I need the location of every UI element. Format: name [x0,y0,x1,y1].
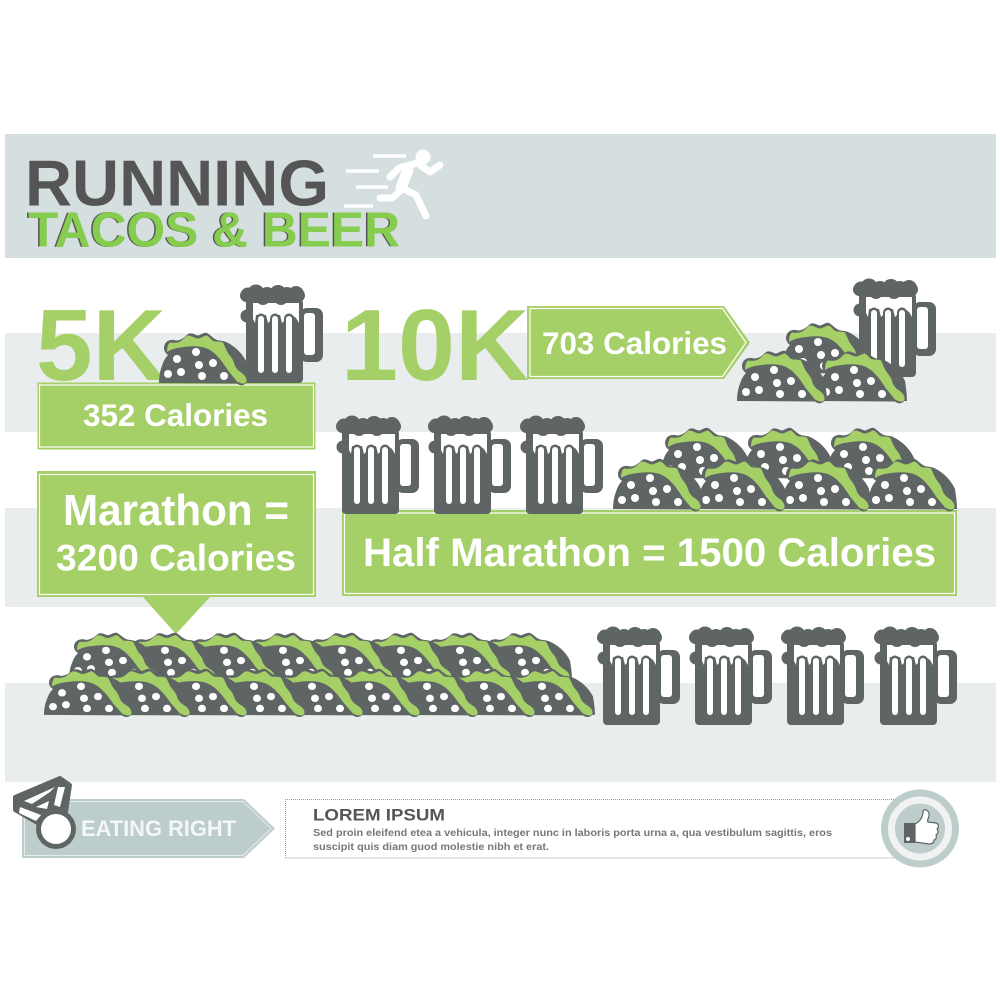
banner: eating right [22,799,275,858]
icon: medal [15,778,76,849]
icon: 5K taco [159,333,249,385]
subtitle: tacos and beer: TACOS & BEER [28,204,400,258]
icons: marathon beers [597,626,957,725]
heading: lorem ipsum: LOREM IPSUM [313,806,445,824]
icons: half marathon beers [336,416,603,514]
body text [313,827,832,853]
callout arrow: 703 calories [527,306,750,379]
callout: marathon calories: Marathon = [63,486,289,535]
callout: marathon calories [37,471,316,634]
icon: runner [344,150,440,216]
background bands [5,333,996,782]
icons: marathon tacos [44,633,595,717]
title: running: RUNNING [25,146,329,220]
callout: 352 calories [38,382,316,450]
callout: half marathon calories [342,510,957,596]
icon: 10K beer [853,278,936,377]
header panel [5,134,996,258]
10K heading: 10K [341,290,529,402]
callout: half marathon calories: Half Marathon = 1500 Calories [363,531,936,575]
body text: suscipit quis diam guod molestie nibh et erat. [313,841,549,853]
subtitle: tacos and beer: TACOS & BEER [26,204,398,258]
callout: marathon calories: 3200 Calories [56,538,296,578]
5K heading: 5K [36,290,166,402]
body text: Sed proin eleifend etea a vehicula, integer nunc in laboris porta urna a, qua vestibulum sagittis, eros [313,827,832,839]
callout arrow: 703 calories: 703 Calories [542,325,727,361]
icons: half marathon tacos [613,428,957,511]
icons: 10K tacos [737,323,907,403]
callout: 352 calories: 352 Calories [83,397,268,433]
icon: 5K beer [240,284,323,383]
icon: thumbs up [881,790,959,868]
panel: lorem ipsum [286,800,900,858]
banner: eating right: EATING RIGHT [81,816,237,841]
